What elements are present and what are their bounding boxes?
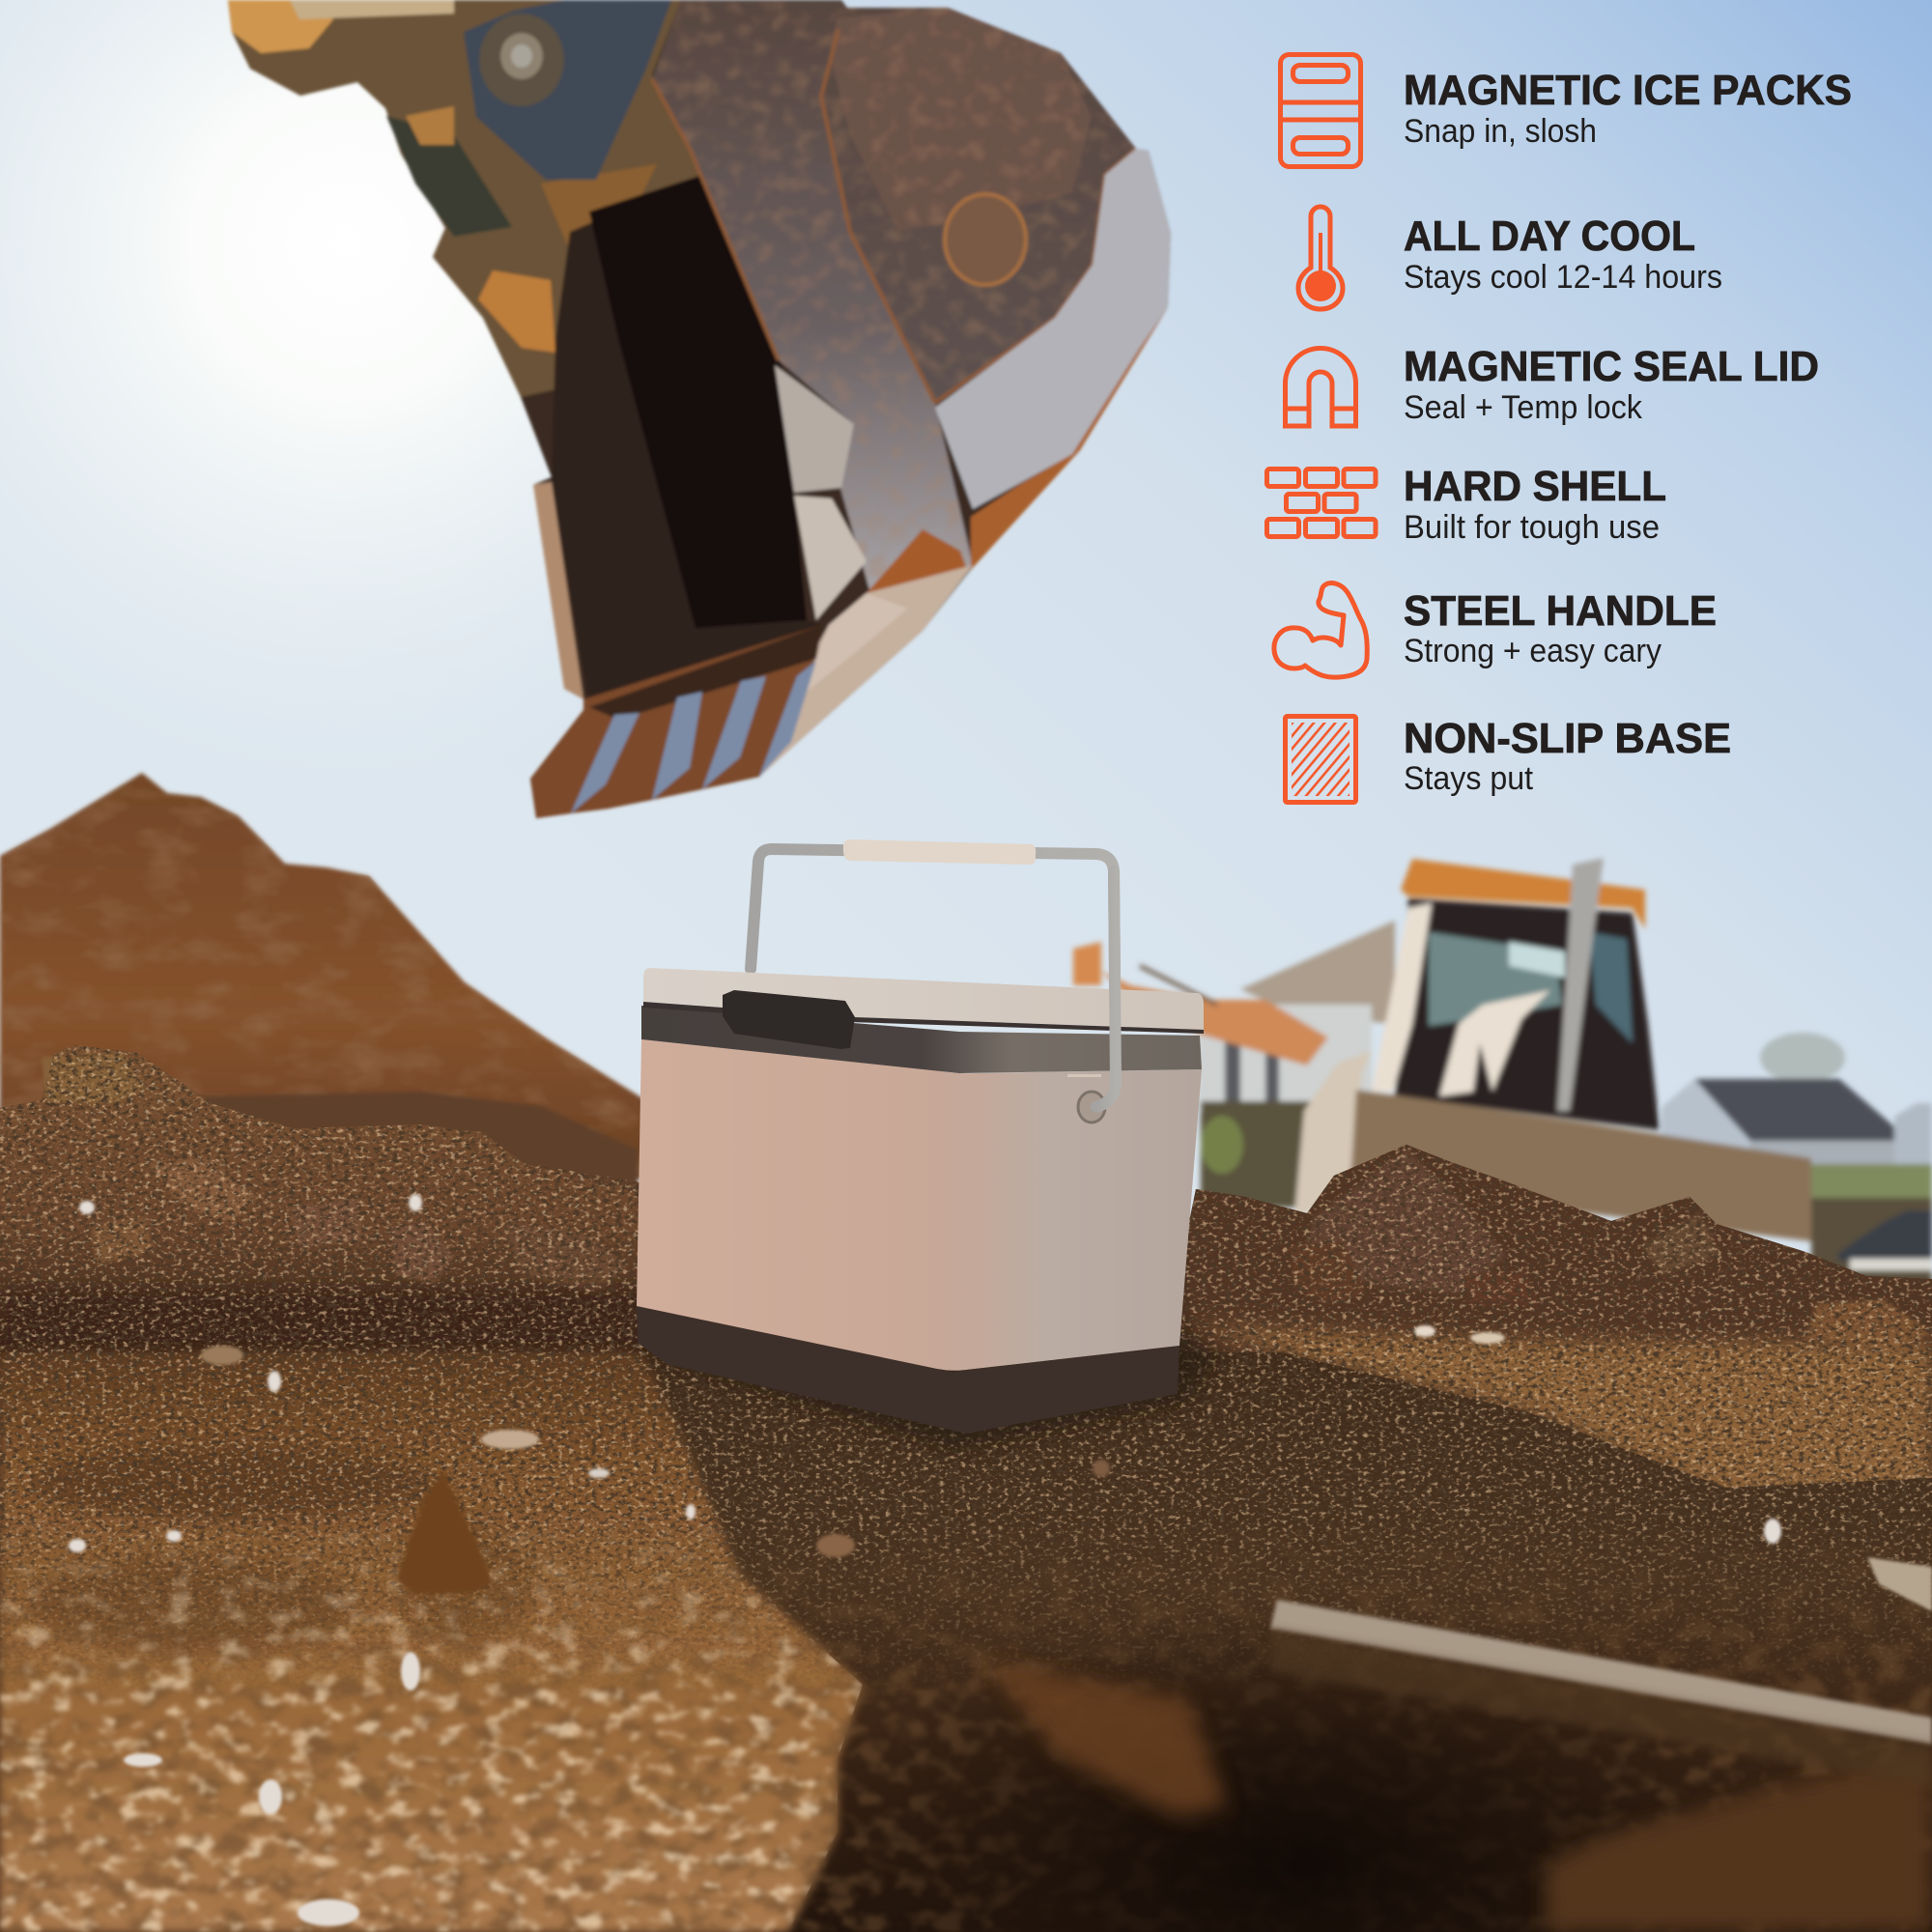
pointed rock bbox=[396, 1470, 493, 1594]
teeth base bbox=[530, 625, 822, 818]
heading: MAGNETIC ICE PACKS bbox=[1404, 67, 1852, 114]
bucket silhouette bbox=[228, 0, 1171, 818]
right rock pile bbox=[1190, 1145, 1932, 1352]
description: Built for tough use bbox=[1404, 509, 1660, 546]
icon: brick wall bbox=[1267, 469, 1376, 537]
description: Stays put bbox=[1404, 760, 1534, 797]
lid bbox=[643, 968, 1204, 1030]
house right bbox=[1662, 1079, 1932, 1198]
feature list bbox=[1267, 54, 1852, 802]
orange excavator arm bbox=[1073, 942, 1328, 1065]
patch of cast shadow bbox=[29, 1446, 435, 1520]
dark band under left pile bbox=[0, 1290, 647, 1348]
far dirt mound, left bbox=[0, 763, 657, 1179]
rust along edge bbox=[971, 307, 1168, 570]
texture bbox=[0, 1043, 1932, 1932]
bulldozer cab bbox=[1294, 858, 1660, 1217]
distant tree bbox=[1760, 1033, 1845, 1083]
heading: STEEL HANDLE bbox=[1404, 587, 1717, 635]
back ridge bbox=[193, 1092, 638, 1198]
side plate bbox=[652, 0, 1136, 589]
small plank right bbox=[1867, 1557, 1932, 1611]
feature: magnetic seal lid bbox=[1285, 343, 1819, 426]
rust edges bbox=[652, 29, 1136, 403]
sky background bbox=[0, 0, 1932, 1352]
background: houses, excavator arm and bulldozer bbox=[1073, 858, 1932, 1285]
icon: horseshoe magnet bbox=[1285, 348, 1356, 426]
dark foreground pit bbox=[792, 1604, 1932, 1932]
icon: textured base bbox=[1285, 717, 1356, 802]
right sunlit ground bbox=[1188, 1325, 1932, 1497]
thin left plate bbox=[533, 482, 583, 699]
bulldozer blade bbox=[1350, 1090, 1811, 1241]
handle, rear leg and top bar bbox=[751, 849, 1116, 1107]
plate bolt bbox=[945, 194, 1026, 285]
shaded ground, centre and right bbox=[638, 1352, 1932, 1932]
teeth bbox=[571, 661, 816, 813]
icon: flexed arm bbox=[1274, 583, 1367, 677]
feature: steel handle bbox=[1274, 583, 1717, 677]
bucket interior bbox=[552, 175, 822, 705]
excavator bucket bbox=[228, 0, 1171, 818]
ground base bbox=[0, 1045, 1932, 1932]
sunlit ground, left bbox=[0, 1352, 863, 1932]
plate wear texture bbox=[647, 0, 1150, 599]
bush and car bbox=[1811, 1164, 1932, 1285]
knuckle, orange sunlit bbox=[228, 0, 702, 397]
scattered pebbles bbox=[69, 1194, 1781, 1926]
blurry brown clods bbox=[985, 1662, 1932, 1932]
light side plates bbox=[775, 365, 854, 493]
front lip bbox=[759, 565, 973, 777]
latch bbox=[723, 990, 855, 1049]
vertical rib bbox=[652, 0, 973, 589]
heading: NON-SLIP BASE bbox=[1404, 715, 1731, 762]
heading: MAGNETIC SEAL LID bbox=[1404, 343, 1819, 390]
handle bracket bbox=[1067, 1074, 1101, 1077]
description: Snap in, slosh bbox=[1404, 113, 1597, 150]
heading: HARD SHELL bbox=[1404, 463, 1666, 510]
icon: thermometer bbox=[1298, 207, 1343, 309]
description: Strong + easy cary bbox=[1404, 633, 1662, 669]
handle grip bbox=[843, 839, 1036, 865]
description: Stays cool 12-14 hours bbox=[1404, 259, 1722, 296]
blue-grey link bbox=[464, 0, 671, 180]
feature: magnetic ice packs bbox=[1280, 54, 1852, 166]
clods on left pile bbox=[42, 1053, 628, 1294]
feature: hard shell bbox=[1267, 463, 1666, 546]
dark band bbox=[641, 1006, 1202, 1073]
light grey wear plate bbox=[935, 149, 1171, 509]
near rock pile, left bbox=[0, 1045, 647, 1352]
handle bolt bbox=[1078, 1092, 1105, 1122]
base bbox=[637, 1306, 1179, 1434]
heading: ALL DAY COOL bbox=[1404, 213, 1695, 260]
cooler shadow bbox=[647, 1333, 1217, 1449]
description: Seal + Temp lock bbox=[1404, 389, 1643, 426]
feature: non-slip base bbox=[1285, 715, 1731, 802]
link bolt bbox=[479, 14, 564, 106]
cooler bbox=[637, 839, 1217, 1449]
handle, front leg bbox=[1096, 871, 1116, 1107]
feature: all day cool bbox=[1298, 207, 1722, 309]
wooden plank bbox=[1270, 1600, 1932, 1745]
foreground ground bbox=[0, 1043, 1932, 1932]
clods on right pile bbox=[1290, 1150, 1932, 1348]
house left bbox=[1198, 921, 1395, 1208]
body bbox=[637, 1039, 1202, 1371]
icon: ice pack bbox=[1280, 54, 1361, 166]
